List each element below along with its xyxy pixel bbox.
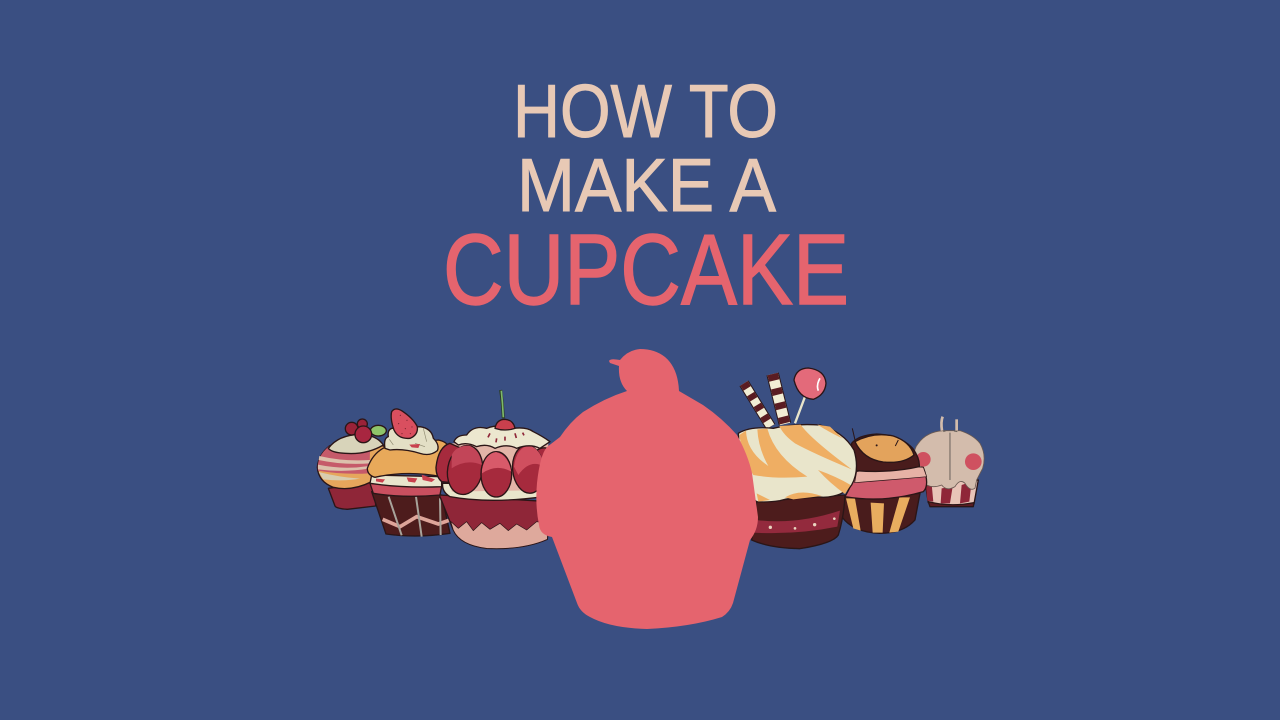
cupcake: strawberry cake (436, 390, 551, 549)
cupcake: swirl with wafers and lollipop (738, 368, 856, 549)
title (443, 69, 849, 326)
title line: cupcake: CUPCAKE (443, 214, 849, 326)
cupcake: cherries and stripes (317, 419, 386, 509)
right cupcakes group (738, 368, 984, 549)
central cupcake silhouette (536, 349, 758, 629)
title line: how to: HOW TO (513, 69, 778, 153)
cupcake: striped wrapper muffin (842, 428, 927, 533)
lollipop (794, 368, 826, 423)
cupcake: ghost with pink spots (914, 417, 984, 507)
wafer stick right (773, 374, 785, 424)
cupcake: strawberry with cream (367, 409, 450, 537)
wafer stick left (744, 383, 771, 427)
left cupcakes group (317, 390, 551, 549)
title line: make a: MAKE A (517, 143, 776, 227)
